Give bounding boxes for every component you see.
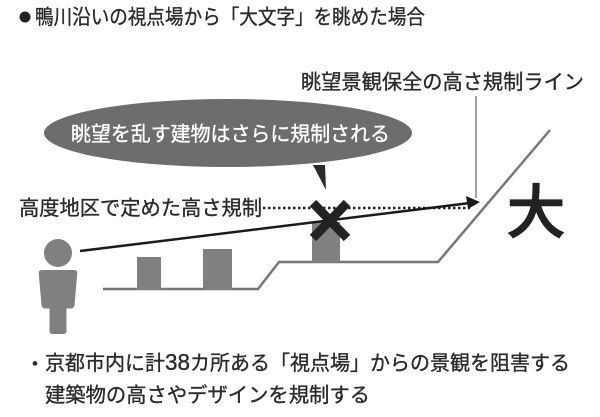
title: 鴨川沿いの視点場から「大文字」を眺めた場合 <box>35 6 425 29</box>
character: dai: 大 <box>508 181 564 245</box>
label: height district limit: 高度地区で定めた高さ規制 <box>19 197 262 220</box>
bullet text <box>25 349 570 407</box>
sight line arrow <box>80 196 480 251</box>
bullet text: 京都市内に計38カ所ある「視点場」からの景観を阻害する <box>45 349 570 375</box>
dotted height limit line <box>263 207 470 209</box>
buildings <box>137 222 340 290</box>
icon: person <box>39 239 77 334</box>
callout bubble: 眺望を乱す建物はさらに規制される <box>71 123 390 146</box>
leader line <box>475 96 477 198</box>
x mark <box>313 203 347 238</box>
bullet text: 建築物の高さやデザインを規制する <box>45 384 370 407</box>
bullet text: ・ <box>25 354 45 376</box>
label: scenic height limit line: 眺望景観保全の高さ規制ライン <box>301 71 584 94</box>
callout bubble <box>44 99 412 190</box>
ground line and slope <box>103 130 550 289</box>
